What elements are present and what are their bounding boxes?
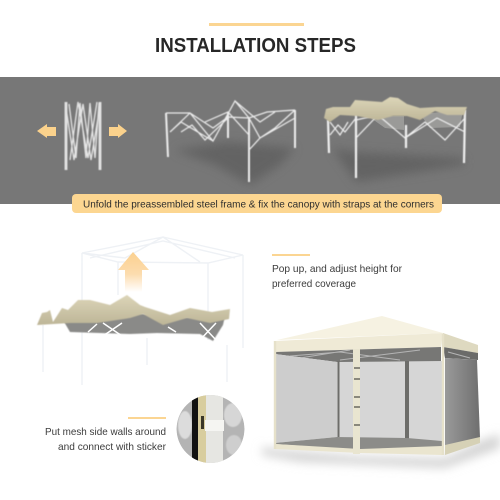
tent — [262, 316, 500, 468]
step text: mesh walls: Put mesh side walls around — [45, 426, 166, 438]
tent right valance — [443, 333, 478, 353]
step text: pop up — [272, 254, 402, 290]
step text: pop up: Pop up, and adjust height for — [272, 263, 402, 275]
tent bottom trim — [275, 444, 442, 455]
tent ceiling — [275, 347, 441, 362]
step text: mesh walls — [45, 417, 166, 453]
opened steel frame — [166, 101, 295, 185]
panel: gray unfolding band — [0, 77, 500, 213]
icon: sticker detail circle — [176, 395, 244, 463]
icon: left arrow — [37, 124, 56, 138]
title rule — [209, 23, 304, 26]
frame with canopy — [324, 97, 467, 182]
tent ground shadow — [262, 434, 500, 468]
folded frame — [66, 102, 100, 170]
step text: mesh walls: and connect with sticker — [58, 441, 166, 453]
floor — [275, 437, 442, 450]
mesh front centre — [337, 361, 442, 441]
icon: right arrow — [109, 124, 127, 138]
icon: up arrow — [118, 252, 149, 292]
centre seam with straps — [353, 349, 360, 454]
mesh front left — [275, 354, 337, 443]
step text: pop up: preferred coverage — [272, 278, 356, 290]
callout bar — [72, 194, 442, 213]
tent front valance — [275, 333, 443, 352]
title: INSTALLATION STEPS — [155, 35, 356, 57]
ghost raised frame — [43, 237, 243, 385]
mesh right — [445, 358, 480, 447]
tent roof — [277, 316, 443, 340]
callout bar: Unfold the preassembled steel frame & fix the canopy with straps at the corners — [83, 198, 434, 210]
lowered canopy — [37, 295, 230, 341]
tent corner poles — [275, 334, 443, 455]
back legs — [338, 361, 340, 437]
